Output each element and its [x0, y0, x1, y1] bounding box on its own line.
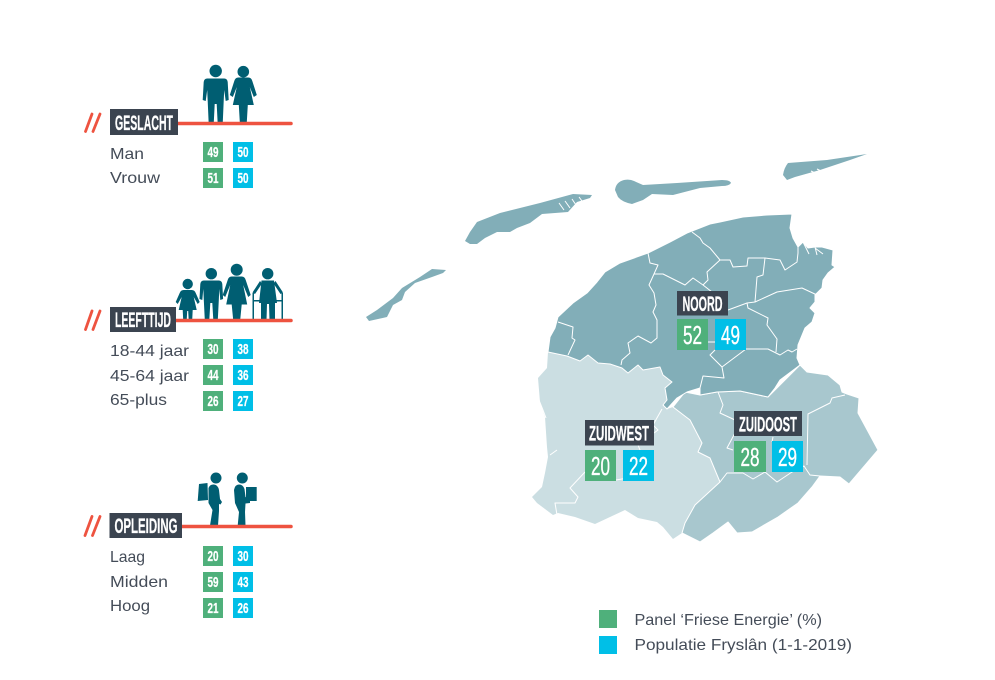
- panel: opleiding: [85, 472, 291, 618]
- row: Midden: 59: [208, 574, 218, 591]
- slashes: [86, 114, 100, 132]
- row: Hoog: 21: [208, 600, 218, 617]
- heading: OPLEIDING: [114, 515, 178, 538]
- row: Man: 49: [208, 144, 218, 161]
- row: Vrouw: [110, 168, 253, 188]
- callout: Noord: NOORD: [682, 293, 722, 316]
- region: Zuidoost: [673, 365, 878, 542]
- legend: [599, 610, 852, 654]
- callout: Zuidwest: 20: [591, 451, 610, 481]
- row: Vrouw: 51: [208, 170, 218, 187]
- icon: student with backpack and student with books: [198, 472, 257, 526]
- heading: [110, 513, 182, 538]
- row: 45-64 jaar: 44: [208, 367, 219, 384]
- legend: Panel ‘Friese Energie’ (%): [634, 612, 822, 629]
- row: Laag: Laag: [110, 549, 145, 566]
- row: Laag: 30: [238, 548, 248, 565]
- callout: Zuidwest: ZUIDWEST: [589, 422, 649, 446]
- callout: Zuidoost: 28: [740, 442, 760, 472]
- row: Hoog: Hoog: [110, 598, 150, 615]
- row: Vrouw: 50: [238, 170, 248, 187]
- legend: Populatie Fryslân (1-1-2019): [634, 637, 852, 654]
- slashes: [85, 516, 100, 536]
- callout: Zuidwest: [585, 420, 654, 481]
- row: 18-44 jaar: [110, 339, 253, 360]
- row: Midden: [110, 572, 253, 592]
- row: Laag: 20: [208, 548, 218, 565]
- heading: LEEFTTIJD: [115, 309, 171, 332]
- callout: Zuidoost: [734, 411, 803, 472]
- map of Fryslan: [366, 154, 878, 542]
- heading: GESLACHT: [115, 112, 173, 135]
- row: Hoog: 26: [238, 600, 248, 617]
- row: 65-plus: 27: [238, 393, 248, 410]
- heading: [110, 307, 176, 332]
- icon: family with walker: [176, 264, 283, 320]
- callout: Zuidwest: 22: [629, 451, 648, 481]
- row: 65-plus: 26: [208, 393, 218, 410]
- row: 18-44 jaar: 18-44 jaar: [110, 343, 190, 360]
- row: 45-64 jaar: 45-64 jaar: [110, 368, 190, 385]
- callout: Zuidoost: ZUIDOOST: [739, 414, 797, 436]
- heading: [110, 109, 178, 135]
- row: Midden: 43: [238, 574, 248, 591]
- row: 65-plus: 65-plus: [110, 392, 167, 409]
- row: 45-64 jaar: [110, 365, 253, 385]
- callout: Noord: [677, 291, 746, 350]
- island notches: [559, 169, 821, 210]
- callout: Zuidoost: 29: [778, 442, 797, 472]
- slashes: [86, 311, 100, 330]
- row: Vrouw: Vrouw: [110, 170, 160, 187]
- islands: [366, 154, 867, 321]
- row: 45-64 jaar: 36: [238, 367, 248, 384]
- row: Man: [110, 142, 253, 163]
- callout: Noord: 52: [683, 320, 702, 350]
- row: 18-44 jaar: 38: [238, 341, 248, 358]
- row: Midden: Midden: [110, 574, 168, 591]
- row: Man: Man: [110, 146, 144, 163]
- icon: man and woman: [203, 65, 257, 124]
- callout: Noord: 49: [721, 320, 740, 350]
- row: Laag: [110, 546, 253, 566]
- row: Man: 50: [238, 144, 248, 161]
- region: Zuidwest: [532, 352, 720, 539]
- row: 18-44 jaar: 30: [208, 341, 218, 358]
- municipal boundaries: [537, 232, 845, 515]
- region: Noord: [548, 214, 835, 409]
- panel: leeftijd: [86, 264, 291, 411]
- panel: geslacht: [86, 65, 291, 188]
- row: Hoog: [110, 598, 253, 618]
- row: 65-plus: [110, 391, 253, 411]
